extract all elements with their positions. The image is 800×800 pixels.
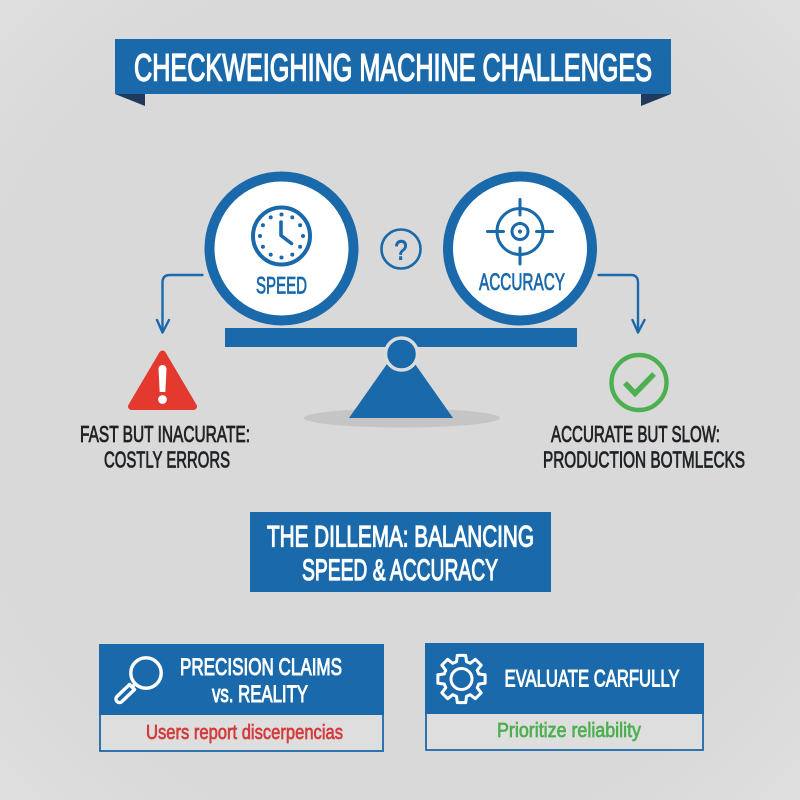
question mark icon: ? xyxy=(394,234,408,266)
accuracy label: ACCURACY xyxy=(479,269,565,296)
dilemma box: SPEED & ACCURACY xyxy=(302,554,498,587)
question mark icon xyxy=(382,230,420,268)
icon: magnifying glass xyxy=(116,658,161,703)
arrow: accuracy to check xyxy=(598,275,644,332)
icon: gear xyxy=(438,655,485,703)
evaluate note: Prioritize reliability xyxy=(497,719,642,742)
icon: warning triangle xyxy=(132,354,194,406)
precision note: Users report discerpencias xyxy=(146,721,343,744)
precision heading: PRECISION CLAIMS xyxy=(180,654,342,681)
text: speed consequence: COSTLY ERRORS xyxy=(104,446,230,472)
dilemma box: THE DILLEMA: BALANCING xyxy=(267,520,534,554)
speed label: SPEED xyxy=(256,272,307,300)
title banner xyxy=(115,39,671,106)
panel: precision claims: vs. REALITY xyxy=(212,681,308,708)
text: speed consequence xyxy=(80,421,250,472)
balance scale xyxy=(225,328,577,418)
accuracy circle xyxy=(448,176,592,320)
text: speed consequence: FAST BUT INACURATE: xyxy=(80,421,250,447)
evaluate heading: EVALUATE CARFULLY xyxy=(504,666,680,692)
arrow: speed to warning xyxy=(157,275,202,332)
speed circle xyxy=(210,176,354,320)
panel: precision claims xyxy=(99,644,384,751)
icon: green check circle xyxy=(612,355,666,410)
shadow under scale xyxy=(304,408,500,428)
dilemma box xyxy=(250,512,551,592)
panel: evaluate carefully xyxy=(425,643,704,750)
text: accuracy consequence xyxy=(543,421,745,472)
icon: target xyxy=(488,200,552,264)
icon: clock xyxy=(253,208,310,264)
